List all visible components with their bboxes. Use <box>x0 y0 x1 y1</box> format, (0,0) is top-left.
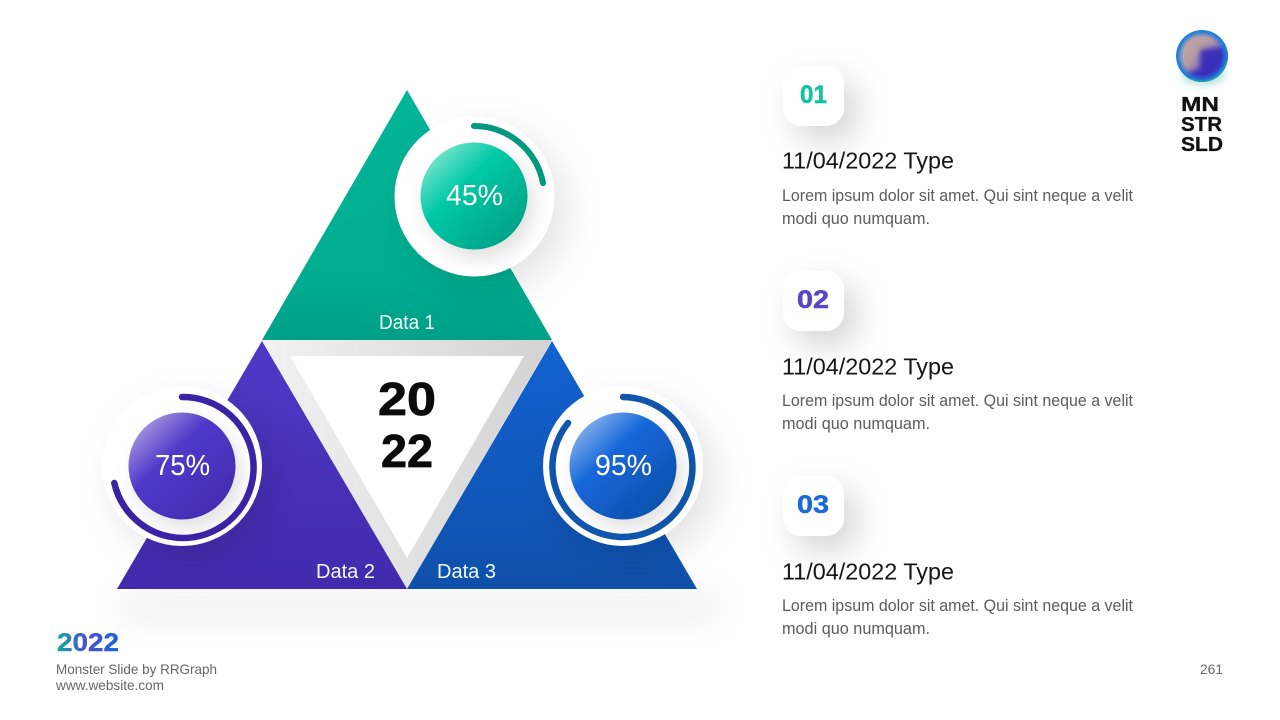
triangle: Data 2 <box>117 341 407 589</box>
triangle: Data 2: Data 2 <box>316 561 375 583</box>
icon: sphere <box>1176 30 1232 86</box>
text 03: modi quo numquam. <box>782 620 930 638</box>
triangle: Data 3: Data 3 <box>437 561 496 583</box>
heading 01: 11/04/2022 Type <box>782 148 954 174</box>
gauge: 95%: 95% <box>595 450 652 482</box>
chart: triangle diagram <box>102 90 720 622</box>
item 03 <box>782 476 1133 638</box>
center inverted triangle with year: 22 <box>381 425 433 477</box>
triangle: Data 1: Data 1 <box>379 312 435 334</box>
logo: STR <box>1181 114 1223 136</box>
gauge: 75% <box>102 386 262 546</box>
page number: 261 <box>1200 661 1223 677</box>
footer <box>55 629 217 693</box>
footer website: www.website.com <box>55 677 164 693</box>
heading 03: 11/04/2022 Type <box>782 558 954 584</box>
text 02: Lorem ipsum dolor sit amet. Qui sint neque a velit <box>782 392 1133 410</box>
badge 01: 01 <box>800 81 827 109</box>
footer credit: Monster Slide by RRGraph <box>56 661 217 677</box>
gauge: 75%: 75% <box>155 450 210 482</box>
footer year: 2022 <box>57 629 119 657</box>
text 01: modi quo numquam. <box>782 210 930 228</box>
badge 03 <box>783 476 844 536</box>
logo: SLD <box>1181 134 1223 156</box>
logo <box>1176 30 1232 156</box>
triangle: Data 1 <box>262 90 552 340</box>
gauge: 95% <box>543 386 703 546</box>
gauge: 45%: 45% <box>446 180 503 212</box>
text 01: Lorem ipsum dolor sit amet. Qui sint neque a velit <box>782 187 1133 205</box>
center inverted triangle with year <box>262 340 552 589</box>
item 02 <box>782 271 1133 433</box>
text 02 <box>782 392 1133 433</box>
logo: MN <box>1181 94 1219 116</box>
item 01 <box>782 66 1133 228</box>
badge 02: 02 <box>797 286 829 314</box>
badge 02 <box>783 271 844 331</box>
gauge: 45% <box>394 116 554 276</box>
heading 02: 11/04/2022 Type <box>782 354 954 380</box>
triangle: Data 3 <box>407 341 697 589</box>
text 03: Lorem ipsum dolor sit amet. Qui sint neque a velit <box>782 597 1133 615</box>
badge 03: 03 <box>797 491 829 519</box>
center inverted triangle with year: 20 <box>378 373 436 425</box>
text 03 <box>782 597 1133 638</box>
text 01 <box>782 187 1133 228</box>
badge 01 <box>783 66 844 126</box>
text 02: modi quo numquam. <box>782 415 930 433</box>
